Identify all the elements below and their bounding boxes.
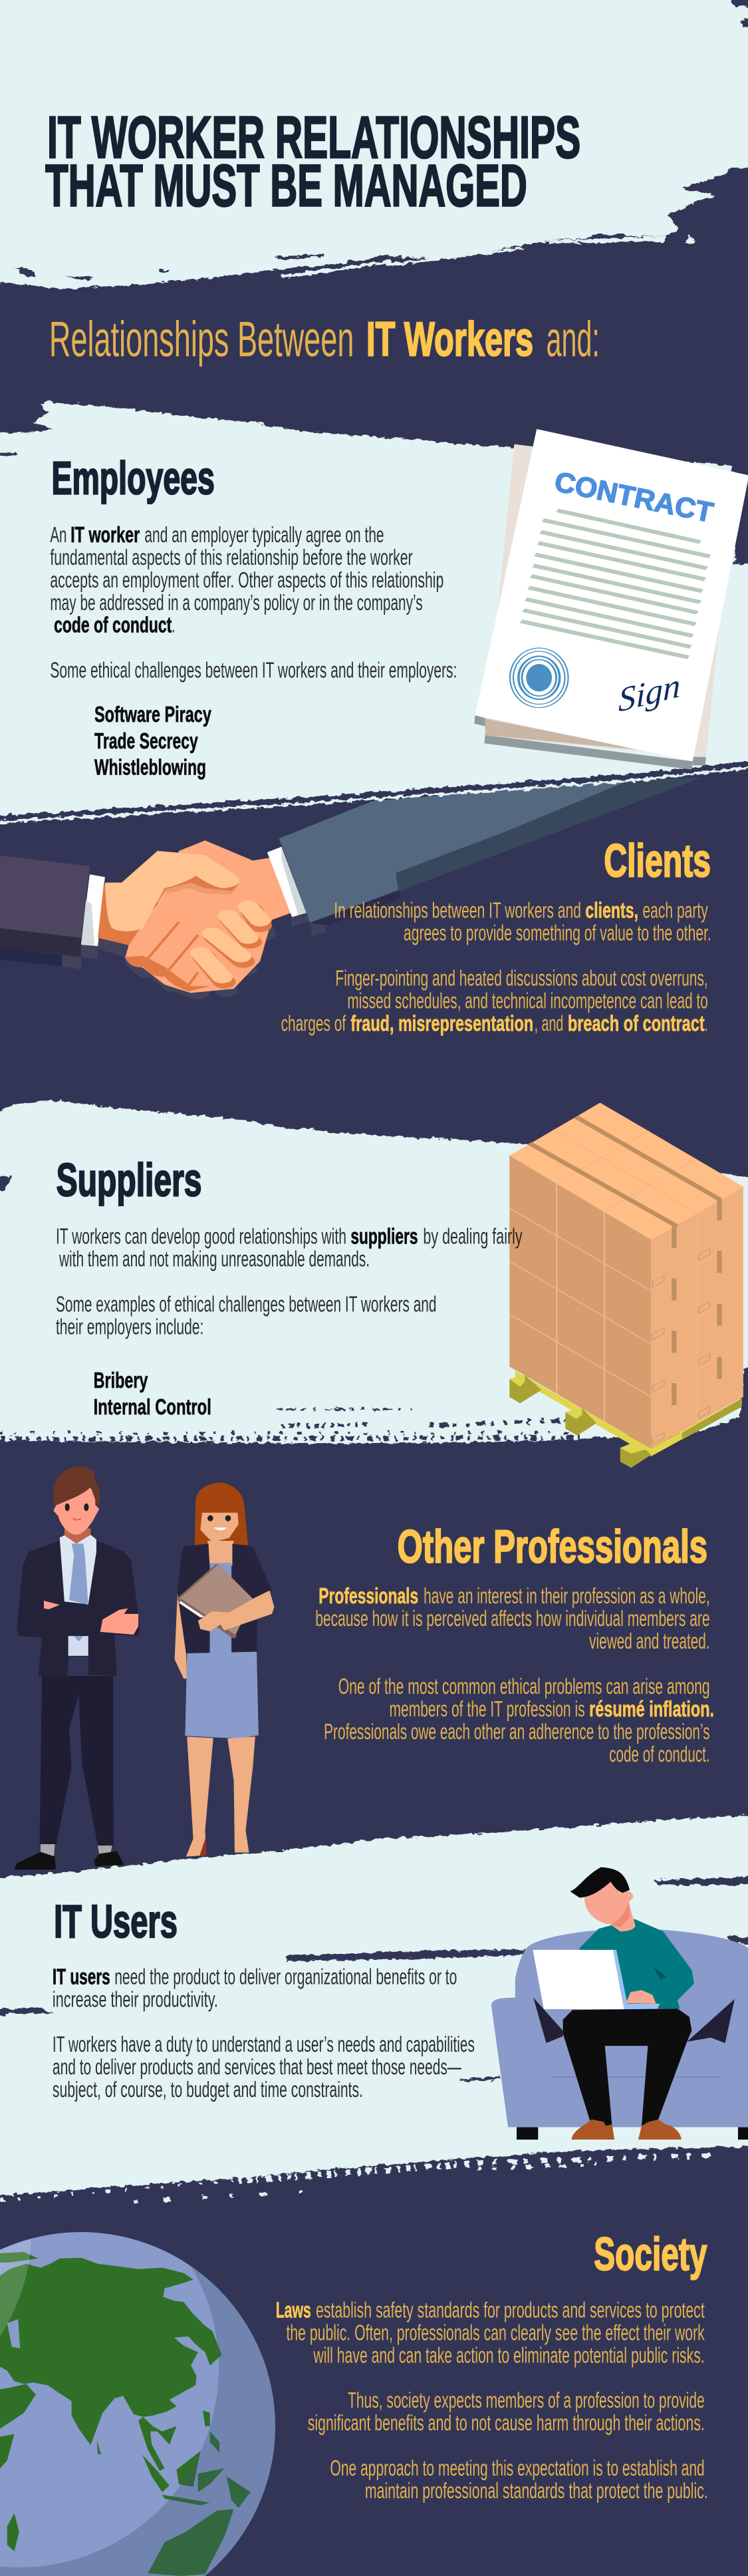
- panel: IT users text: IT Users: [54, 1895, 178, 1947]
- illustration: boxes on pallet: [509, 1102, 743, 1468]
- inland water: [7, 2319, 20, 2348]
- text block: employees intro: IT worker: [70, 522, 140, 547]
- text block: IT users needs: increase their productivity.: [53, 1987, 218, 2011]
- panel: clients text: [281, 835, 711, 1035]
- panel: employees text: Software Piracy: [94, 702, 211, 726]
- pallet: [509, 1370, 742, 1468]
- text block: employees intro: code of conduct: [54, 613, 172, 637]
- text block: IT users needs: IT users: [53, 1965, 110, 1989]
- text block: IT workers duty: [53, 2032, 475, 2102]
- illustration: globe: [0, 2232, 275, 2576]
- text block: clients disputes: , and: [535, 1011, 563, 1035]
- text block: clients disputes: [281, 966, 708, 1035]
- box marks: [653, 1249, 710, 1444]
- contract text lines: [521, 510, 710, 657]
- back sheet: [485, 444, 735, 757]
- illustration: person on sofa with laptop: [491, 1867, 748, 2140]
- illustration: contract: [474, 429, 748, 770]
- list: supplier challenges: Bribery: [94, 1368, 148, 1392]
- sheet shadows: [474, 715, 706, 770]
- text block: employees intro: .: [172, 613, 175, 637]
- signature: Sign: [618, 666, 680, 719]
- panel: suppliers text: Suppliers: [57, 1154, 202, 1206]
- panel: employees text: Trade Secrecy: [94, 728, 198, 753]
- title: [45, 104, 580, 219]
- continents: [0, 2239, 275, 2576]
- illustration: handshake: [0, 778, 701, 993]
- panel: employees text: Employees: [51, 452, 215, 504]
- panel: IT users text: [53, 1895, 475, 2102]
- globe shade: [0, 2267, 275, 2576]
- panel: other professionals text: [315, 1520, 714, 1766]
- brush marks: light flecks in title edge: [279, 236, 695, 278]
- list: employee challenges: [94, 702, 211, 780]
- text block: professional standards: [330, 2456, 708, 2503]
- contract title: CONTRACT: [552, 466, 716, 528]
- text block: IT users needs: [53, 1965, 457, 2011]
- text block: laws: Laws: [276, 2298, 311, 2323]
- seal: [510, 648, 568, 708]
- brush marks: suppliers lower edge speckle: [0, 1409, 587, 1439]
- text block: society expectations: [308, 2388, 705, 2436]
- panel: society text: [276, 2228, 708, 2503]
- panel: suppliers text: [56, 1154, 523, 1419]
- brush: employees thin stripe: [0, 764, 748, 825]
- box faces: [509, 1102, 743, 1239]
- text block: suppliers challenges: their employers include:: [56, 1315, 203, 1339]
- panel: suppliers text: Internal Control: [94, 1394, 211, 1419]
- text block: clients disputes: charges of: [281, 1011, 346, 1035]
- brush marks: IT users lower edge speckle: [0, 2155, 711, 2201]
- panel: employees text: [50, 452, 457, 780]
- text block: laws: [276, 2298, 705, 2368]
- text block: suppliers intro: [56, 1224, 523, 1271]
- text block: resume inflation: [324, 1674, 714, 1766]
- text block: professionals interest: [315, 1583, 710, 1653]
- panel: clients text: .: [705, 1011, 708, 1035]
- person: [533, 1867, 694, 2140]
- text block: professionals interest: Professionals: [318, 1583, 418, 1608]
- sofa: [491, 1929, 748, 2140]
- text block: clients intro: clients,: [585, 898, 638, 922]
- brush: title panel: [0, 0, 748, 289]
- text: and:: [547, 311, 600, 367]
- brush: employees panel: [0, 402, 748, 817]
- text block: employees intro: An: [50, 522, 66, 547]
- text block: employees intro: [50, 522, 443, 637]
- text block: suppliers intro: suppliers: [350, 1224, 418, 1249]
- text block: clients intro: [334, 898, 711, 945]
- illustration: businessman: [15, 1467, 140, 1869]
- illustration: businesswoman: [175, 1483, 275, 1857]
- list: supplier challenges: [94, 1368, 211, 1419]
- front sheet: [475, 429, 748, 761]
- box seams: [509, 1130, 743, 1423]
- packing tape: [529, 1117, 720, 1405]
- text block: suppliers challenges: [56, 1292, 437, 1339]
- globe highlight: [0, 2229, 31, 2336]
- text: by dealing fairly: [423, 1224, 523, 1249]
- panel: employees text: Whistleblowing: [94, 755, 206, 780]
- brush: suppliers panel: [0, 1100, 748, 1444]
- brush: IT users panel: [0, 1814, 748, 2197]
